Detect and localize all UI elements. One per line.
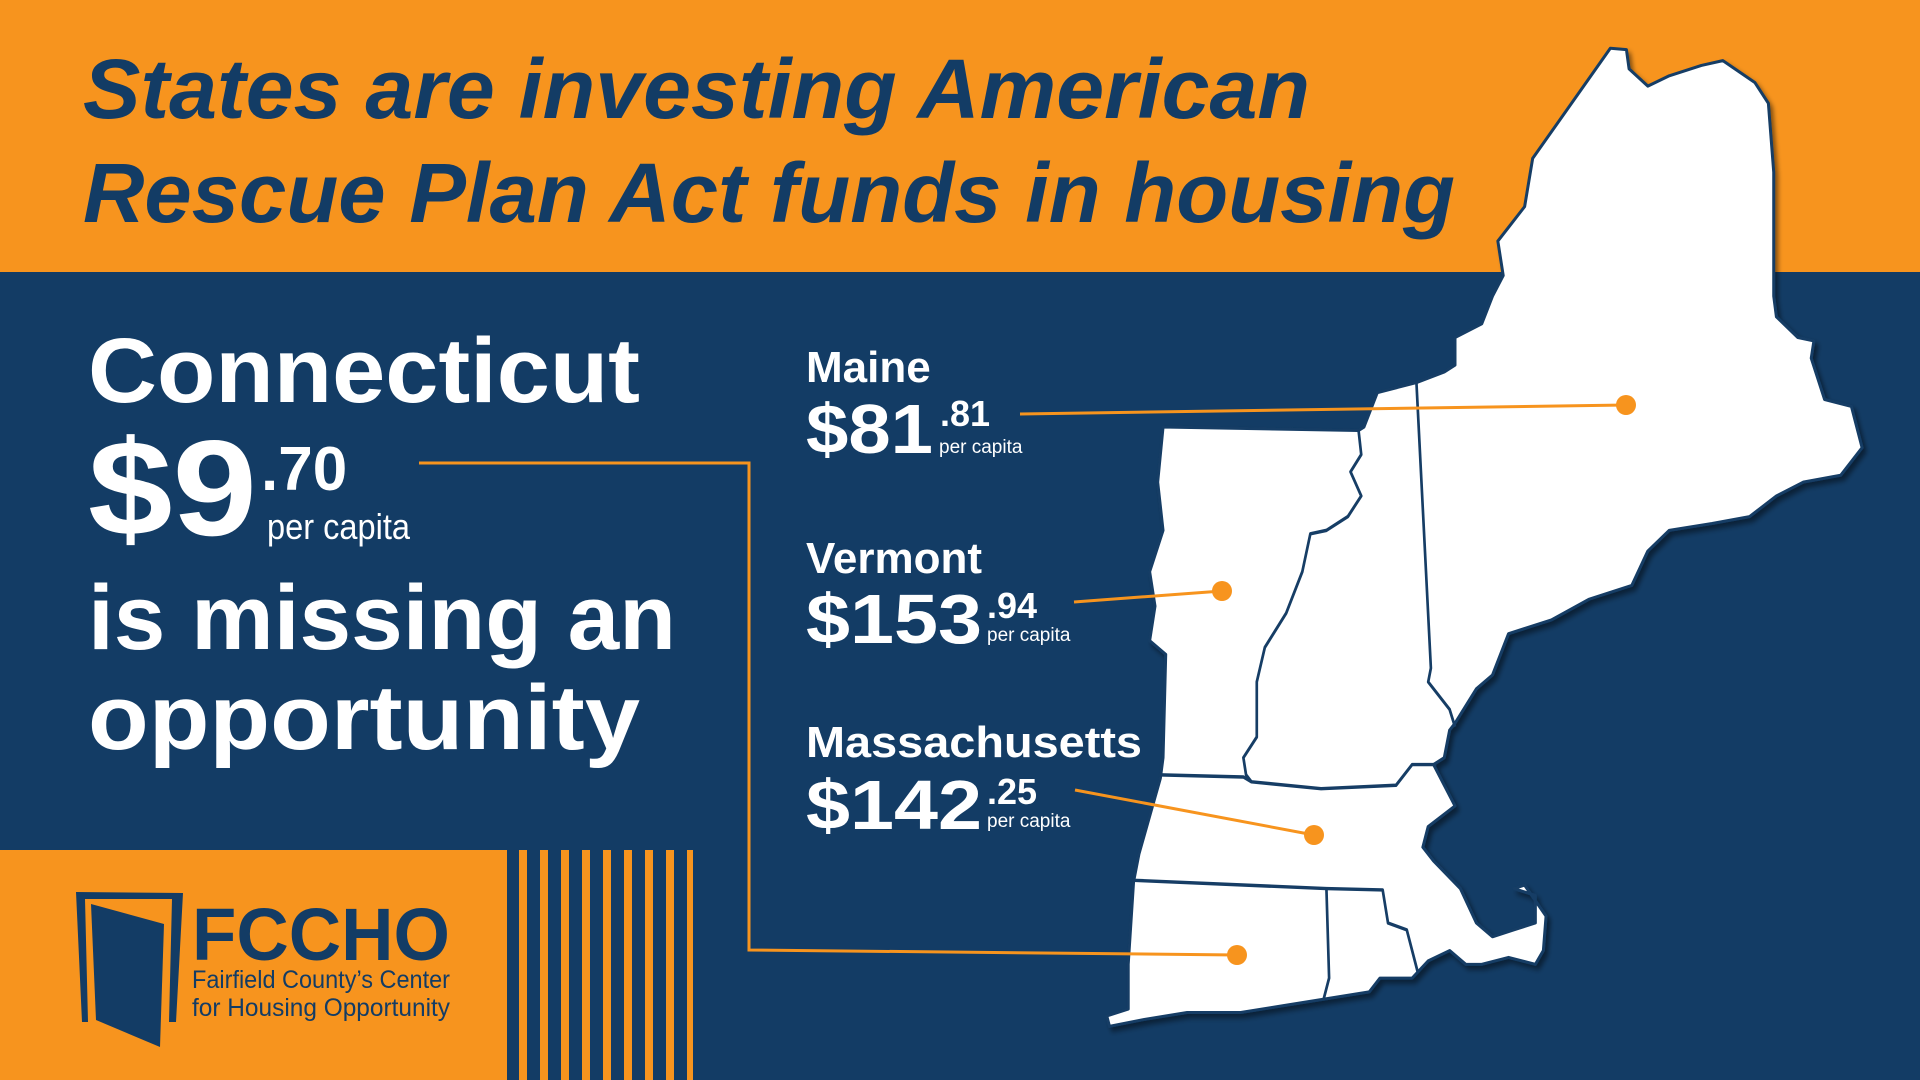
Massachusetts label: $142 (806, 766, 982, 844)
Connecticut headline: per capita (267, 506, 411, 547)
Vermont label: .94 (987, 585, 1037, 626)
Maine label: .81 (940, 393, 990, 434)
Massachusetts label: Massachusetts (806, 718, 1142, 767)
Connecticut headline: Connecticut (88, 320, 640, 422)
logo panel (0, 850, 693, 1080)
Connecticut headline: $9 (88, 412, 257, 564)
Connecticut headline: is missing an (88, 567, 676, 669)
title: States are investing American (83, 42, 1310, 136)
Massachusetts label (806, 718, 1142, 844)
Maine label: Maine (806, 343, 931, 392)
icon: door (76, 892, 183, 1047)
connector lines and dots (419, 405, 1626, 955)
Maine label: $81 (806, 390, 933, 468)
logo panel: for Housing Opportunity (192, 994, 450, 1022)
Vermont label: per capita (987, 625, 1071, 646)
Massachusetts label: per capita (987, 811, 1071, 832)
title: Rescue Plan Act funds in housing (83, 146, 1455, 240)
Massachusetts label: .25 (987, 771, 1037, 812)
header band (0, 0, 1920, 272)
Vermont label: $153 (806, 580, 982, 658)
Connecticut headline: .70 (261, 435, 347, 504)
Connecticut headline: opportunity (88, 667, 640, 769)
stripes (519, 850, 693, 1080)
Vermont label (806, 534, 1071, 658)
logo text: FCCHO (192, 893, 450, 976)
logo panel: Fairfield County’s Center (192, 966, 450, 994)
Connecticut headline (88, 320, 676, 769)
map: New England (1107, 48, 1862, 1026)
title (83, 42, 1455, 240)
Maine label: per capita (939, 437, 1023, 458)
Maine label (806, 343, 1023, 468)
Vermont label: Vermont (806, 534, 982, 583)
